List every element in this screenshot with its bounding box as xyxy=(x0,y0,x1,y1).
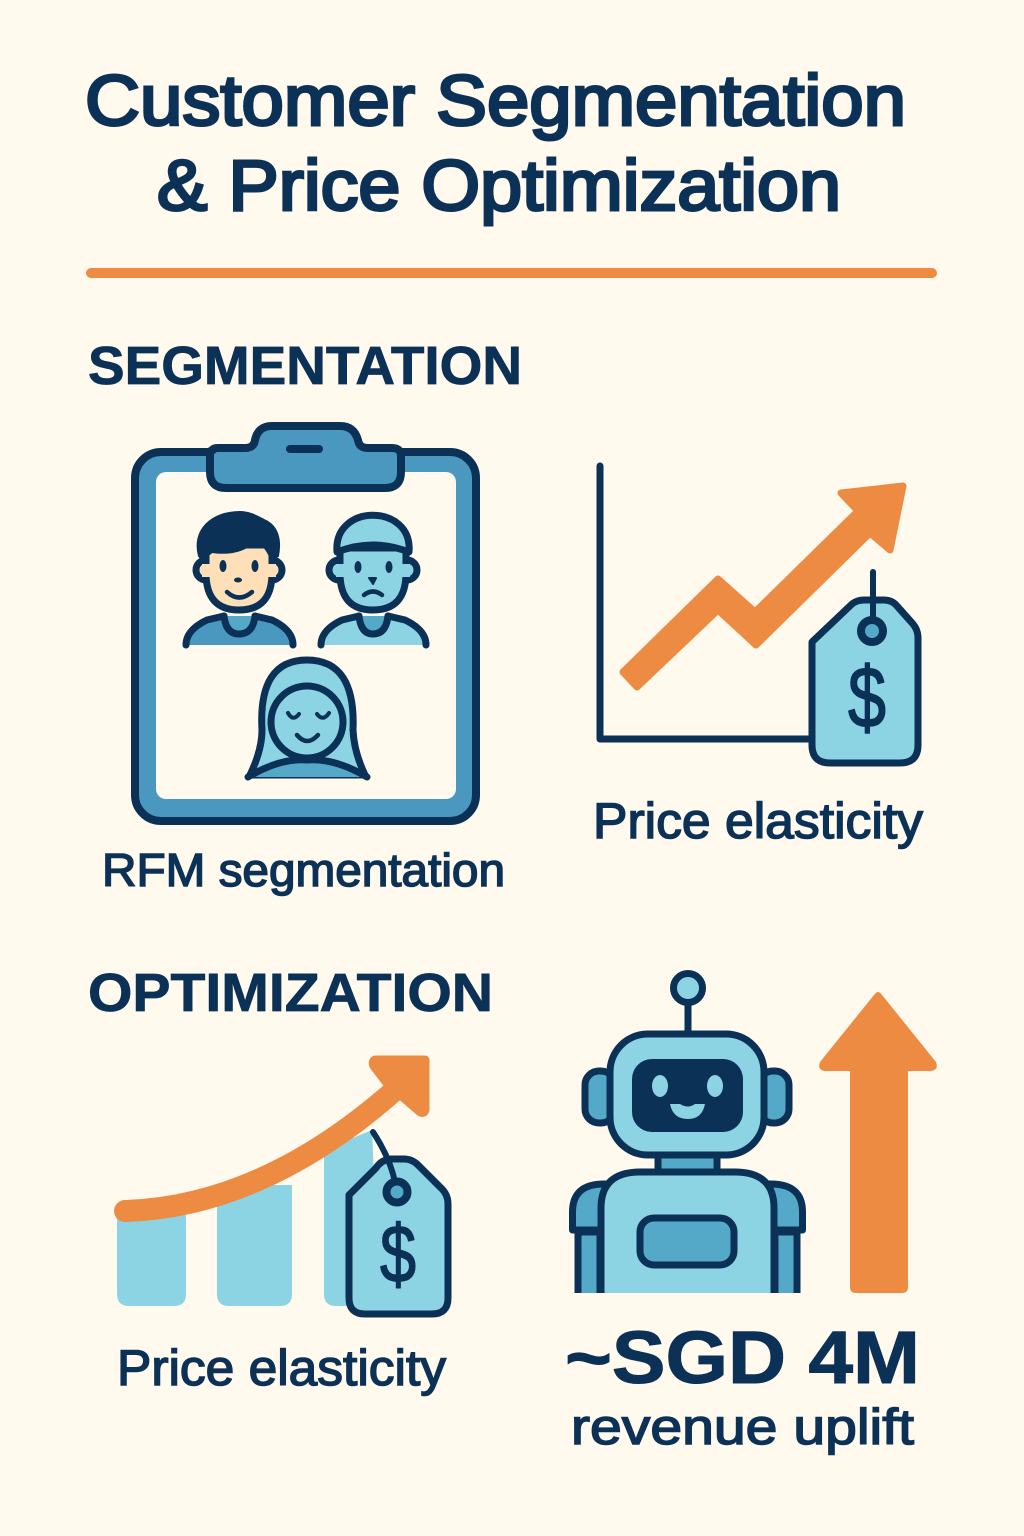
icon: clipboard with three customers xyxy=(135,426,476,821)
label: price elasticity: Price elasticity xyxy=(593,793,923,849)
customer: man with cap xyxy=(321,515,426,645)
label: price elasticity: Price elasticity xyxy=(117,1340,446,1396)
arrow: revenue up xyxy=(819,992,937,1293)
icon: robot xyxy=(572,974,802,1293)
icon: price tag xyxy=(349,1132,448,1314)
heading: segmentation: SEGMENTATION xyxy=(88,336,522,396)
chart: price elasticity line with price tag xyxy=(600,466,918,763)
icon: price tag: $ xyxy=(848,650,886,746)
icon: price tag: $ xyxy=(380,1209,416,1300)
heading: optimization: OPTIMIZATION xyxy=(88,963,493,1023)
icon: price tag xyxy=(812,572,918,763)
title: Customer Segmentation xyxy=(85,62,906,141)
stat: revenue uplift: ~SGD 4M xyxy=(565,1316,920,1399)
stat: revenue uplift: revenue uplift xyxy=(571,1399,914,1455)
title: & Price Optimization xyxy=(157,147,841,226)
title xyxy=(85,62,906,226)
stat: revenue uplift xyxy=(565,1316,920,1455)
customer: woman with long hair xyxy=(248,660,367,777)
label: RFM segmentation: RFM segmentation xyxy=(102,844,505,896)
chart: bars with rising curve and price tag xyxy=(117,1060,448,1314)
customer: smiling man xyxy=(186,512,293,645)
